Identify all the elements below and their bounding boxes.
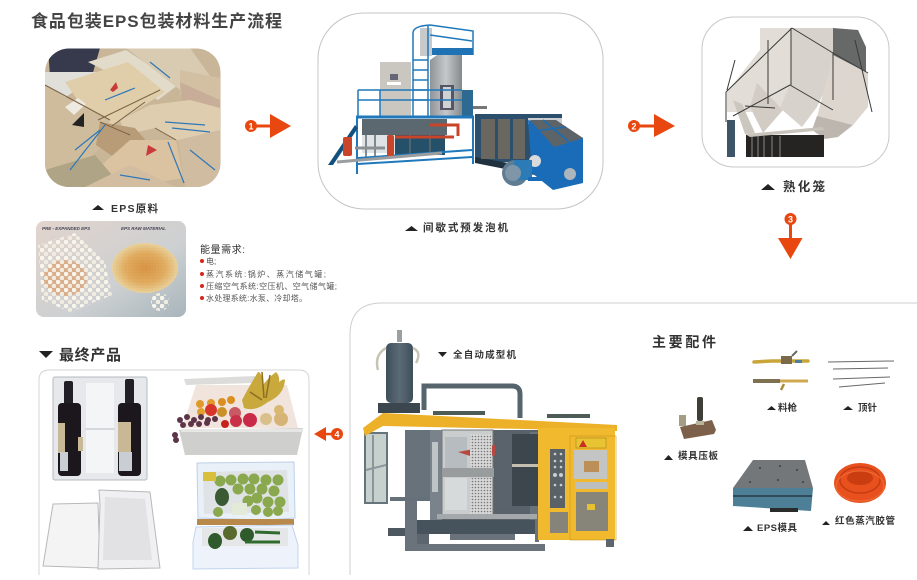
photo: EPS beads: EPS RAW MATERIAL <box>121 226 166 231</box>
part: ejector pins <box>828 361 894 387</box>
photo: ageing silo <box>726 28 872 157</box>
caption: automatic moulding machine: 全自动成型机 <box>453 349 516 361</box>
arrow 1 <box>245 114 291 138</box>
product: fruit box <box>172 372 303 455</box>
product: vegetable boxes <box>193 462 298 569</box>
caption: material gun: 料枪 <box>778 402 797 414</box>
arrow 4 <box>314 427 343 441</box>
panel: moulding machine and parts outline <box>350 303 917 575</box>
panel: batch pre-expander <box>318 13 603 209</box>
photo: EPS beads: PRE - EXPANDED EPS <box>42 226 90 231</box>
caption: mould clamp <box>664 450 718 462</box>
arrow 2: 2 <box>631 122 637 132</box>
panel: final products <box>39 370 309 575</box>
photo: EPS raw material bags <box>45 48 221 188</box>
caption: material gun <box>767 402 797 414</box>
arrow 4: 4 <box>334 430 340 440</box>
caption: EPS mould: EPS模具 <box>757 522 797 534</box>
energy requirements: 电; <box>206 256 216 266</box>
arrow 3: 3 <box>788 214 793 224</box>
hopper frame <box>475 114 562 162</box>
yellow top and cabinet <box>363 413 617 436</box>
machine: pre-expander <box>328 25 583 190</box>
caption: ejector pins <box>843 402 877 414</box>
caption: red steam hose: 红色蒸汽胶管 <box>835 515 895 527</box>
caption: EPS mould <box>743 522 797 534</box>
heading: final products: 最终产品 <box>59 346 121 364</box>
part: EPS mould <box>733 460 813 512</box>
caption: ageing silo: 熟化笼 <box>783 179 825 194</box>
heading: main parts: 主要配件 <box>652 334 716 350</box>
panel: ageing silo <box>702 17 889 167</box>
caption: EPS raw material <box>92 202 158 215</box>
caption: batch pre-expander: 间歇式预发泡机 <box>423 221 508 234</box>
energy requirements: 压缩空气系统:空压机、空气储气罐; <box>206 281 337 291</box>
caption: mould clamp: 模具压板 <box>678 450 718 462</box>
energy requirements: 蒸汽系统:锅炉、蒸汽储气罐; <box>206 269 326 279</box>
machine body <box>405 430 430 498</box>
title: 食品包装EPS包装材料生产流程 <box>31 11 282 31</box>
part: material gun <box>753 351 808 390</box>
energy requirements: 能量需求: <box>200 243 245 256</box>
photo: EPS beads <box>36 221 186 317</box>
machine: automatic moulding machine <box>363 330 617 551</box>
caption: ejector pins: 顶针 <box>858 402 877 414</box>
product: foam box <box>43 490 160 569</box>
energy requirements: 水处理系统:水泵、冷却塔。 <box>206 293 307 303</box>
caption: EPS raw material: EPS原料 <box>111 202 158 215</box>
product: wine tray <box>53 377 147 480</box>
energy requirements <box>200 243 337 303</box>
part: red steam hose <box>834 463 886 503</box>
arrow 3 <box>778 213 802 259</box>
arrow 2 <box>628 114 675 137</box>
part: mould clamp <box>679 397 716 439</box>
caption: ageing silo <box>761 179 825 194</box>
arrow 1: 1 <box>248 122 254 132</box>
